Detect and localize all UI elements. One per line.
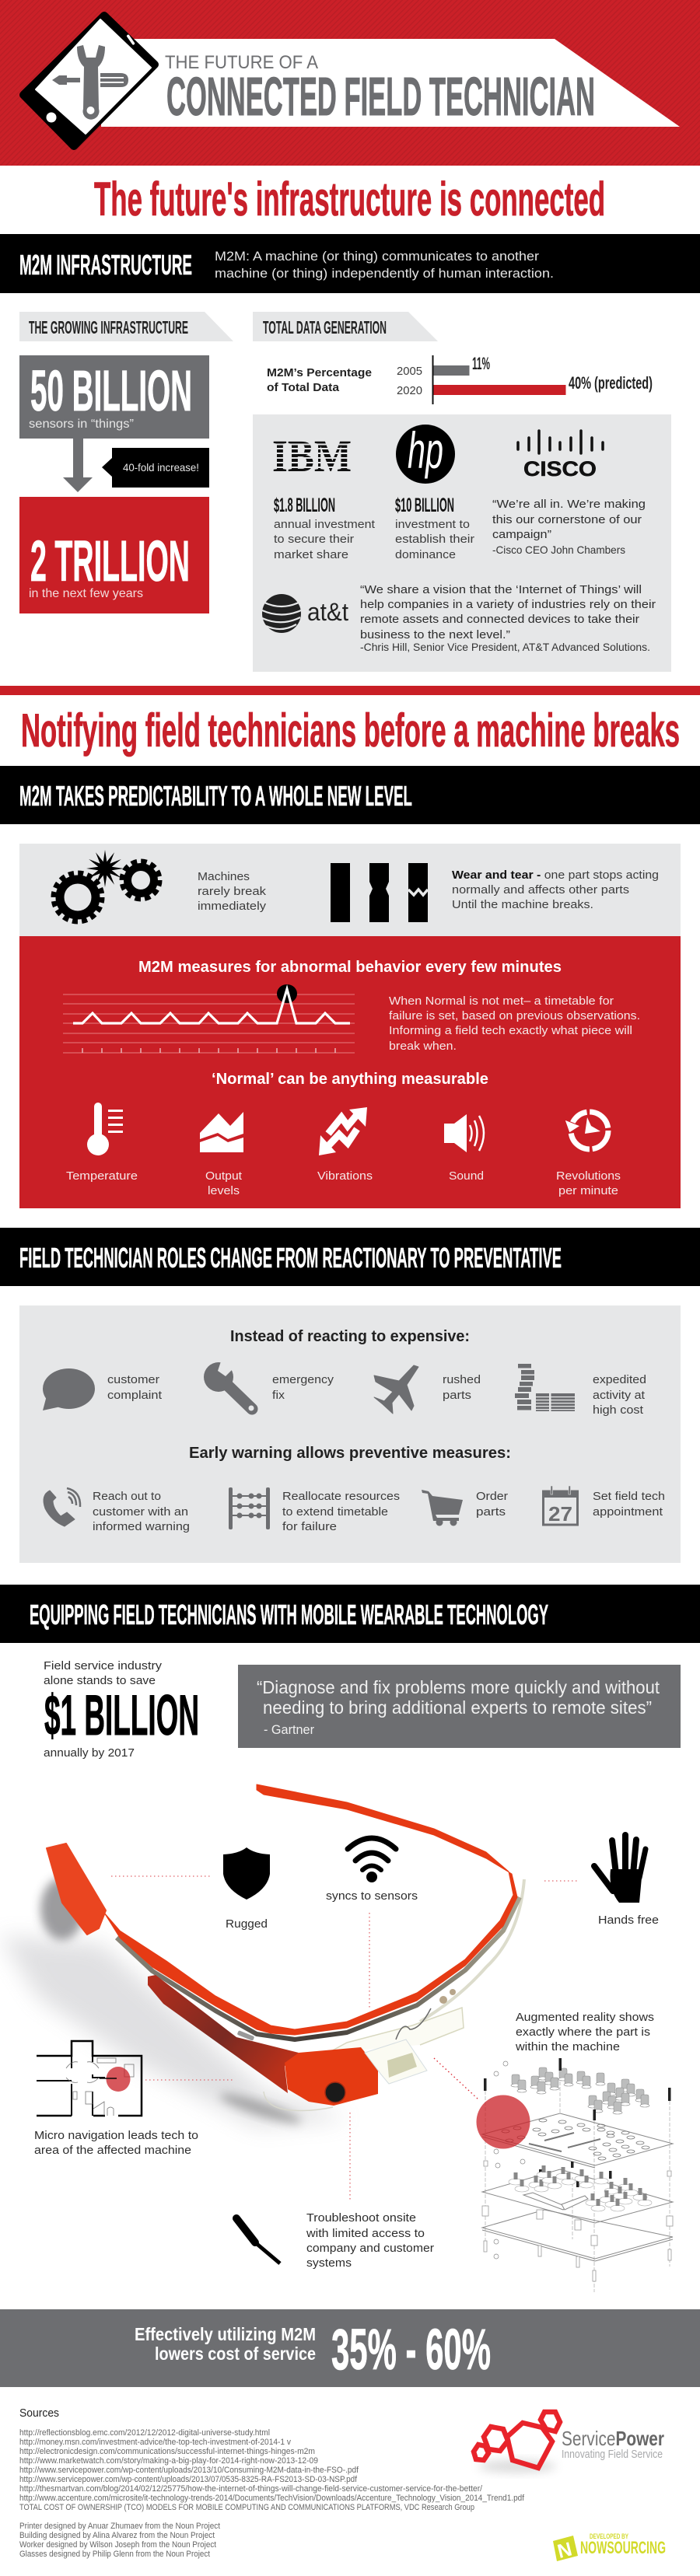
bar chart: M2M share of total data: 2020: [397, 384, 422, 397]
icon: parts and money: [515, 1364, 575, 1412]
Cisco quote: -Cisco CEO John Chambers: [492, 544, 625, 556]
stat: $1 billion saved: annually by 2017: [44, 1746, 135, 1760]
section bar: field technician roles: [0, 1228, 700, 1286]
callout: troubleshoot onsite: [236, 2113, 434, 2270]
icon: abacus: [229, 1487, 270, 1529]
callout: floor plan micro navigation: area of the affected machine: [34, 2144, 191, 2157]
callout: troubleshoot onsite: systems: [306, 2256, 352, 2270]
text: order parts: Order: [476, 1490, 508, 1503]
callout: augmented reality: exactly where the part is: [516, 2025, 650, 2039]
text: order parts: [476, 1490, 508, 1519]
sources: http://thesmartvan.com/blog/2014/02/12/25775/how-the-internet-of-things-will-change-field-service-customer-service-for-the-better/: [19, 2484, 483, 2494]
text: reallocate: for failure: [282, 1520, 337, 1533]
icon: cart: [422, 1490, 463, 1526]
sources: http://electronicdesign.com/communications/successful-internet-things-hinges-m2m: [19, 2447, 315, 2456]
IBM investment: to secure their: [274, 533, 354, 546]
panel: M2M measures: [19, 936, 681, 1208]
AT&T quote: [360, 583, 656, 653]
callout: troubleshoot onsite: Troubleshoot onsite: [306, 2211, 416, 2225]
text: machines rarely break: Machines: [198, 870, 250, 883]
icon: calendar: 27: [548, 1502, 572, 1526]
icon: thermometer: [87, 1103, 123, 1155]
diagram: exploded machine: [482, 2058, 673, 2292]
callout: syncs to sensors: [326, 1838, 418, 2008]
icon credits: Building designed by Alina Alvarez from the Noun Project: [19, 2531, 215, 2540]
sources: http://www.accenture.com/microsite/it-technology-trends-2014/Documents/TechVision/Downloads/Accenture_Technology_Vision_2014_Trend1.pdf: [19, 2494, 525, 2503]
label: vibrations: Vibrations: [317, 1169, 373, 1183]
label: sound: Sound: [449, 1169, 484, 1183]
IBM investment: market share: [274, 548, 348, 561]
callout: hands free: [544, 1835, 659, 1927]
text: expedited activity: expedited: [593, 1373, 646, 1386]
Cisco quote: this our cornerstone of our: [492, 513, 642, 526]
callout: hands free: Hands free: [598, 1914, 659, 1927]
callout: troubleshoot onsite: with limited access to: [306, 2227, 425, 2240]
heading: abnormal behavior: M2M measures for abnormal behavior every few minutes: [138, 959, 562, 976]
callout: 40-fold: [102, 448, 209, 488]
bar chart: M2M share of total data: 11%: [472, 354, 490, 373]
stat: 50 billion: sensors in “things”: [29, 418, 134, 431]
Cisco quote: “We’re all in. We’re making: [492, 498, 646, 511]
logo: ServicePower: [474, 2412, 664, 2473]
logo: HP: [396, 421, 455, 484]
text: set field tech: [593, 1490, 665, 1519]
AT&T quote: business to the next level.”: [360, 628, 510, 641]
callout: rugged: [111, 1847, 270, 1931]
text: reallocate: Reallocate resources: [282, 1490, 400, 1503]
bar chart: M2M share of total data: of Total Data: [267, 381, 340, 394]
icon credits: Printer designed by Anuar Zhumaev from the Noun Project: [19, 2522, 220, 2531]
sources: Sources: [19, 2406, 59, 2420]
HP investment: dominance: [395, 548, 456, 561]
text: reallocate: [282, 1490, 400, 1533]
text: expedited activity: [593, 1373, 646, 1417]
logo: NowSourcing: N: [555, 2538, 574, 2563]
icon: calendar: [542, 1486, 579, 1526]
AT&T quote: help companies in a variety of industries rely on their: [360, 598, 656, 611]
AT&T quote: “We share a vision that the ‘Internet of Things’ will: [360, 583, 642, 596]
text: reach out: customer with an: [93, 1505, 188, 1519]
text: emergency fix: fix: [272, 1389, 285, 1402]
header title text: [165, 52, 595, 127]
banner: cost savings: Effectively utilizing M2M: [135, 2324, 316, 2344]
label: temperature: Temperature: [66, 1169, 138, 1183]
arrow down: [63, 439, 93, 492]
sources: http://www.marketwatch.com/story/making-a-big-play-for-2014-right-now-2013-12-09: [19, 2456, 318, 2466]
banner: cost savings: [0, 2309, 700, 2387]
stat: 50 billion: 50 BILLION: [30, 358, 192, 423]
text: machines rarely break: immediately: [198, 900, 267, 913]
callout: rugged: Rugged: [226, 1917, 268, 1931]
panel: company investments: [253, 414, 671, 672]
text: set field tech: Set field tech: [593, 1490, 665, 1503]
text: set field tech: appointment: [593, 1505, 663, 1519]
quote: Gartner: - Gartner: [264, 1722, 314, 1737]
icon: phone with tools: [23, 16, 155, 146]
stat: $1 billion saved: Field service industry: [44, 1659, 163, 1672]
sources: http://money.msn.com/investment-advice/the-top-tech-investment-of-2014-1 v: [19, 2438, 291, 2447]
icon: screwdriver: [236, 2218, 280, 2263]
icon: output levels: [200, 1112, 243, 1152]
callout: augmented reality: [434, 2011, 673, 2292]
text: reach out: [93, 1490, 190, 1533]
text: wear and tear: [452, 869, 659, 911]
sources: [19, 2406, 525, 2512]
text: customer complaint: complaint: [107, 1389, 163, 1402]
heading: early warning: Early warning allows preventive measures:: [189, 1445, 511, 1462]
label: revolutions: per minute: [558, 1184, 618, 1197]
text: rushed parts: [443, 1373, 481, 1402]
banner: cost savings: 35% - 60%: [331, 2317, 491, 2382]
icon: plane: [374, 1365, 418, 1414]
icon: speech bubble: [43, 1368, 95, 1410]
callout: augmented reality: Augmented reality shows: [516, 2011, 654, 2024]
Cisco quote: campaign”: [492, 528, 551, 541]
callout: syncs to sensors: syncs to sensors: [326, 1889, 418, 1903]
logo: NowSourcing: DEVELOPED BY: [590, 2532, 628, 2540]
text: expedited activity: high cost: [593, 1403, 644, 1417]
divider bar: [0, 686, 700, 695]
bar chart: M2M share of total data: [267, 354, 653, 404]
tab: total data generation: [253, 312, 438, 341]
text: when normal is not met: When Normal is not met– a timetable for: [389, 994, 614, 1008]
banner: cost savings: lowers cost of service: [155, 2344, 316, 2364]
quote: Gartner: [238, 1665, 681, 1748]
sources: http://www.servicepower.com/wp-content/uploads/2013/07/0535-8325-RA-FS2013-SD-03-NSP.pdf: [19, 2475, 358, 2484]
heading: normal measurable: ‘Normal’ can be anything measurable: [212, 1071, 488, 1088]
icon: vibrations: [319, 1107, 367, 1155]
logo: HP: hp: [408, 421, 443, 479]
sources: http://reflectionsblog.emc.com/2012/12/2012-digital-universe-study.html: [19, 2428, 270, 2438]
icon: wear bars: [331, 863, 428, 922]
text: customer complaint: customer: [107, 1373, 159, 1386]
label: output levels: Output: [205, 1169, 243, 1183]
icon: floor plan: [37, 2041, 142, 2116]
heading: instead of reacting: Instead of reacting to expensive:: [230, 1328, 470, 1345]
IBM investment: annual investment: [274, 518, 376, 531]
logo: AT&T: [262, 594, 348, 633]
callout: floor plan micro navigation: Micro navigation leads tech to: [34, 2129, 198, 2142]
HP investment: investment to: [395, 518, 470, 531]
section bar: M2M infrastructure: M2M: A machine (or thing) communicates to another: [215, 249, 539, 264]
label: output levels: levels: [208, 1184, 240, 1197]
HP investment: $10 BILLION: [395, 495, 454, 516]
bar chart: M2M share of total data: 2005: [397, 365, 422, 378]
HP investment: establish their: [395, 533, 474, 546]
logo: Cisco: [518, 431, 603, 481]
section bar: predictability: [0, 766, 700, 824]
stat: $1 billion saved: [44, 1659, 199, 1760]
icon: wrench: [204, 1359, 254, 1410]
logo: ServicePower: ServicePower: [562, 2427, 664, 2450]
text: emergency fix: emergency: [272, 1373, 334, 1386]
logo: ServicePower: Innovating Field Service: [562, 2448, 663, 2461]
IBM investment: [274, 495, 376, 561]
stat: $1 billion saved: alone stands to save: [44, 1674, 156, 1687]
text: reach out: informed warning: [93, 1520, 190, 1533]
icon: sound: [444, 1114, 484, 1152]
bar chart: M2M share of total data: M2M’s Percentage: [267, 366, 372, 379]
panel: wear and tear: [19, 844, 681, 936]
callout: 40-fold: 40-fold increase!: [123, 461, 199, 474]
section bar: M2M infrastructure: machine (or thing) independently of human interaction.: [215, 266, 554, 281]
logo: Cisco: CISCO: [523, 457, 597, 481]
panel: reactive vs preventive: [19, 1305, 681, 1563]
text: rushed parts: parts: [443, 1389, 471, 1402]
tab: growing infrastructure: [19, 312, 233, 341]
text: when normal is not met: [389, 994, 640, 1053]
callout: troubleshoot onsite: company and customer: [306, 2242, 434, 2255]
text: when normal is not met: break when.: [389, 1040, 457, 1053]
title ribbon: [101, 39, 680, 127]
stat: $1 billion saved: $1 BILLION: [44, 1684, 199, 1747]
icon credits: Worker designed by Wilson Joseph from the Noun Project: [19, 2540, 216, 2550]
quote: Gartner: needing to bring additional experts to remote sites”: [263, 1697, 652, 1718]
header title text: THE FUTURE OF A: [165, 52, 318, 73]
text: when normal is not met: Informing a field tech exactly what piece will: [389, 1024, 632, 1037]
callout: floor plan micro navigation: [34, 2041, 235, 2157]
icon credits: Glasses designed by Philip Glenn from the Noun Project: [19, 2550, 210, 2559]
AT&T quote: -Chris Hill, Senior Vice President, AT&T Advanced Solutions.: [360, 641, 650, 653]
text: wear and tear: normally and affects other parts: [452, 883, 629, 897]
text: emergency fix: [272, 1373, 334, 1402]
stat: 2 trillion: in the next few years: [29, 587, 143, 600]
sources: http://www.servicepower.com/wp-content/uploads/2013/10/Consuming-M2M-data-in-the-FSO-.pdf: [19, 2466, 359, 2475]
header banner: [0, 0, 700, 166]
text: wear and tear: Wear and tear - one part stops acting: [452, 869, 659, 882]
tab: growing infrastructure: THE GROWING INFRASTRUCTURE: [29, 317, 188, 337]
logo: NowSourcing: [553, 2532, 666, 2563]
quote: Gartner: “Diagnose and fix problems more quickly and without: [257, 1677, 660, 1697]
text: when normal is not met: failure is set, based on previous observations.: [389, 1009, 640, 1022]
stat: 2 trillion: [19, 497, 209, 613]
text: reach out: Reach out to: [93, 1490, 161, 1503]
icon: breaking gears: [54, 850, 159, 921]
label: output levels: [205, 1169, 243, 1197]
tab: total data generation: TOTAL DATA GENERATION: [263, 317, 387, 337]
text: expedited activity: activity at: [593, 1389, 646, 1402]
IBM investment: $1.8 BILLION: [274, 495, 335, 516]
text: customer complaint: [107, 1373, 163, 1402]
sources: TOTAL COST OF OWNERSHIP (TCO) MODELS FOR MOBILE COMPUTING AND COMMUNICATIONS PLATFORMS, VDC Research Group: [19, 2503, 474, 2512]
text: wear and tear: Until the machine breaks.: [452, 898, 593, 911]
text: order parts: parts: [476, 1505, 506, 1519]
HP investment: [395, 495, 474, 561]
text: machines rarely break: [198, 870, 267, 913]
Cisco quote: [492, 498, 646, 556]
icon: revolutions: [565, 1112, 608, 1149]
callout: augmented reality: within the machine: [515, 2040, 620, 2053]
logo: IBM: IBM: [272, 431, 352, 481]
stat: 2 trillion: 2 TRILLION: [30, 529, 190, 593]
text: reallocate: to extend timetable: [282, 1505, 388, 1519]
label: revolutions: Revolutions: [556, 1169, 621, 1183]
line chart: normal vs spike: [63, 984, 355, 1053]
label: revolutions: [556, 1169, 621, 1197]
stat: 50 billion: [19, 355, 209, 439]
logo: AT&T: at&t: [307, 598, 348, 626]
icon credits: [19, 2522, 220, 2559]
section bar: M2M infrastructure: M2M INFRASTRUCTURE: [19, 249, 192, 281]
section bar: M2M infrastructure: [0, 234, 700, 293]
icon: phone call: [44, 1488, 80, 1526]
section bar: equipping: [0, 1585, 700, 1643]
photo: smart glasses: [0, 1784, 524, 2129]
text: rushed parts: rushed: [443, 1373, 481, 1386]
text: machines rarely break: rarely break: [198, 885, 267, 898]
AT&T quote: remote assets and connected devices to take their: [360, 613, 639, 626]
bar chart: M2M share of total data: 40% (predicted): [569, 373, 653, 393]
